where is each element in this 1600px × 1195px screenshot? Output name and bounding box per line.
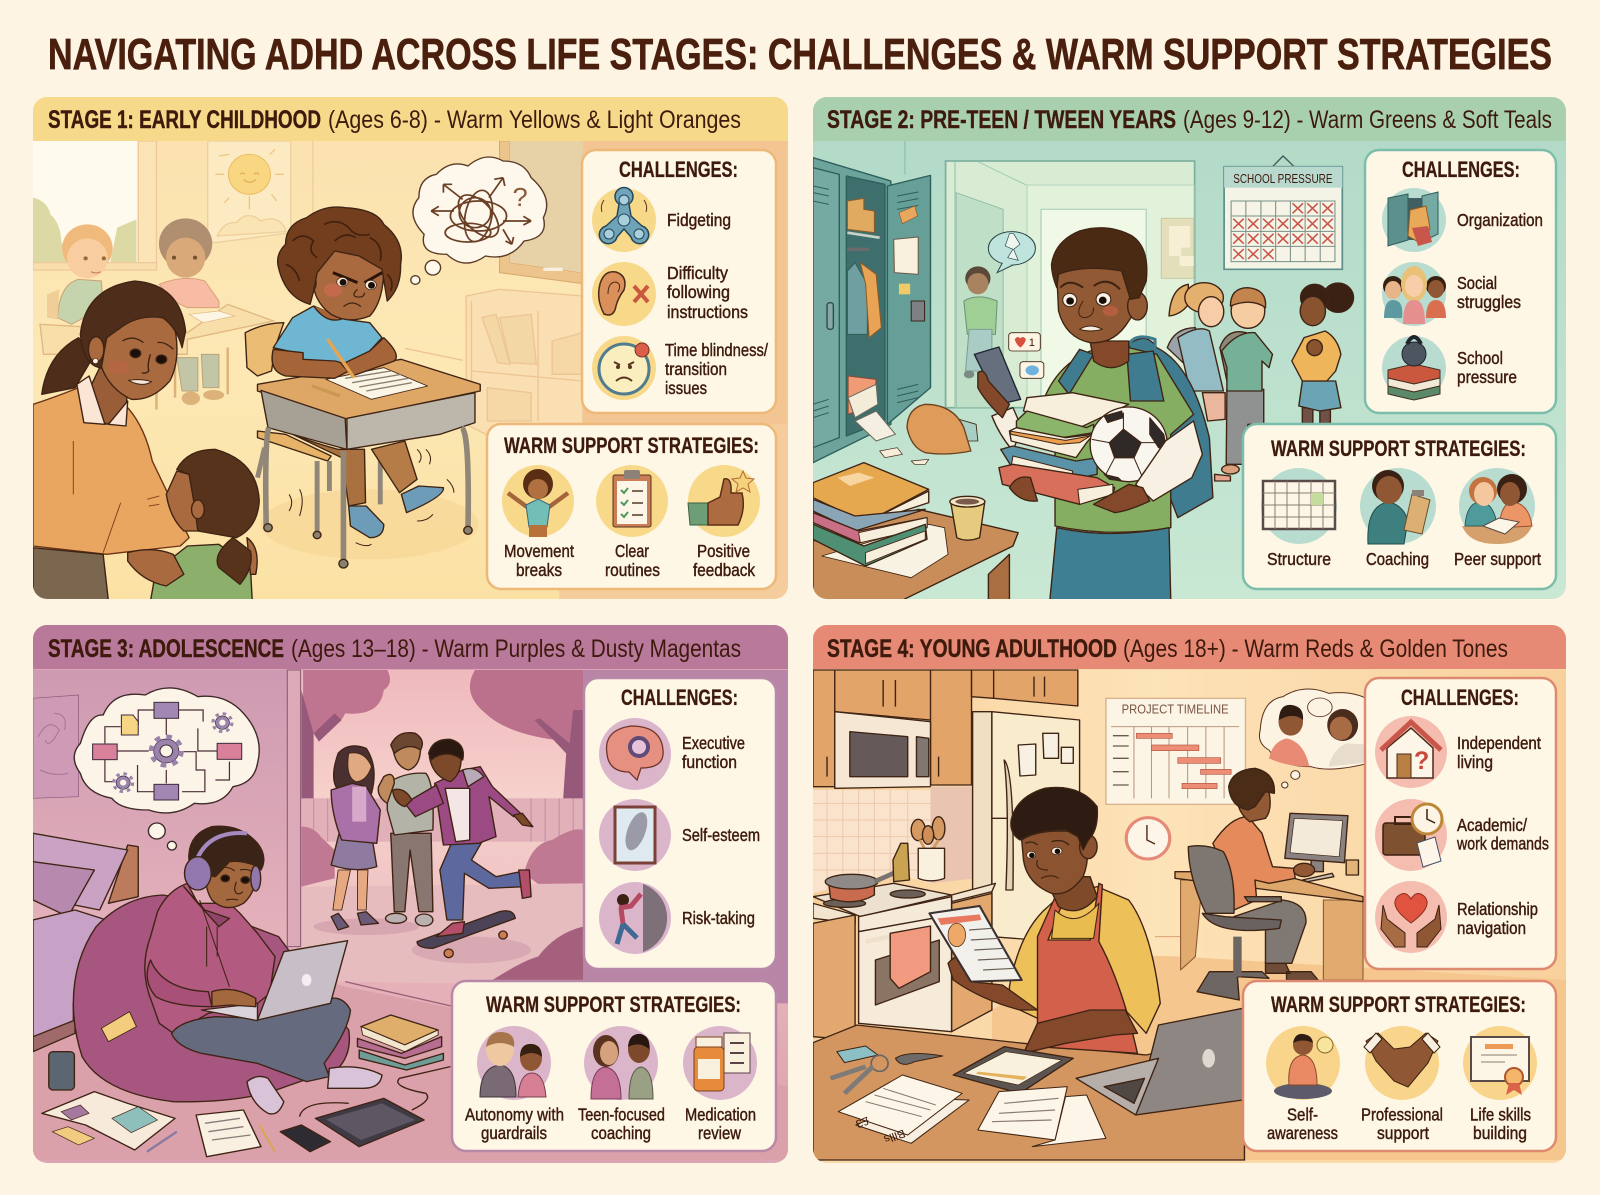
icon: social struggles xyxy=(1382,262,1446,326)
label: clear routines: routines xyxy=(605,560,660,580)
overwhelmed boy with books, ball and phone xyxy=(974,228,1213,601)
floor items: books, notebook, devices xyxy=(42,1015,450,1157)
label: self-awareness xyxy=(1267,1104,1338,1143)
label: structure: Structure xyxy=(1267,549,1331,569)
box: strategies xyxy=(452,981,776,1151)
window xyxy=(33,141,156,270)
label: executive function: Executive xyxy=(682,733,745,753)
box: challenges xyxy=(582,150,776,413)
wall poster xyxy=(33,695,79,798)
items on counter: tablet, laptop, papers, keys: £3 xyxy=(854,1114,871,1130)
label: school pressure xyxy=(1457,348,1517,387)
box: challenges xyxy=(1365,678,1556,969)
label: time blindness xyxy=(665,340,768,398)
box: strategies xyxy=(1243,424,1556,589)
label: organization: Organization xyxy=(1457,210,1543,230)
box: strategies xyxy=(1243,981,1556,1151)
icon: weekly schedule xyxy=(1261,468,1337,544)
sun poster xyxy=(208,138,291,243)
stage 2 header xyxy=(813,97,1566,141)
label: positive feedback: Positive xyxy=(697,541,750,561)
illustration: kitchen and home office xyxy=(813,670,1567,1160)
illustration: classroom xyxy=(33,138,805,601)
label: time blindness: issues xyxy=(665,378,707,398)
overwhelmed boy with books, ball and phone: 1 xyxy=(1029,337,1035,349)
background children xyxy=(40,218,273,409)
label: school pressure: School xyxy=(1457,348,1503,368)
woman reading tablet xyxy=(929,787,1160,1053)
label: autonomy with guardrails: guardrails xyxy=(481,1123,547,1143)
icon: cracked mirror xyxy=(599,799,671,871)
panel: stage 3 adolescence xyxy=(33,625,788,1163)
stage 1 header: (Ages 6-8) - Warm Yellows & Light Oranges xyxy=(328,106,741,134)
icon: house with question mark xyxy=(1375,716,1447,788)
icon: clipboard checklist xyxy=(596,465,668,537)
project timeline chart xyxy=(1106,698,1245,804)
label: positive feedback xyxy=(693,541,755,580)
label: relationship navigation: Relationship xyxy=(1457,899,1538,919)
icon: coach with clipboard xyxy=(1360,468,1436,544)
illustration: bedroom and friends outside xyxy=(33,670,788,1160)
label: autonomy with guardrails: Autonomy with xyxy=(465,1104,564,1124)
box: challenges xyxy=(1365,150,1556,413)
icon: briefcase and clock xyxy=(1375,799,1447,871)
icon: handshake xyxy=(1364,1026,1440,1100)
group of classmates xyxy=(1167,283,1354,481)
teacher xyxy=(33,281,259,601)
label: difficulty following instructions xyxy=(667,263,748,322)
icon: hands and heart xyxy=(1375,881,1447,953)
label: clear routines: Clear xyxy=(615,541,649,561)
bookshelf xyxy=(466,289,583,436)
stage 2 header: STAGE 2: PRE-TEEN / TWEEN YEARS xyxy=(827,106,1176,134)
label: coaching: Coaching xyxy=(1366,549,1429,569)
label: self-awareness: Self- xyxy=(1287,1104,1318,1124)
label: teen-focused coaching: Teen-focused xyxy=(578,1104,665,1124)
calendar: school pressure xyxy=(1224,156,1342,269)
icon: peers studying xyxy=(1459,468,1535,544)
heading: challenges: CHALLENGES: xyxy=(621,685,738,710)
counter xyxy=(813,1025,1244,1160)
label: relationship navigation xyxy=(1457,899,1538,938)
heading: challenges: CHALLENGES: xyxy=(1401,685,1519,710)
stage 4 header: STAGE 4: YOUNG ADULTHOOD xyxy=(827,635,1117,663)
label: independent living: Independent xyxy=(1457,733,1541,753)
label: life skills building xyxy=(1470,1104,1531,1143)
label: positive feedback: feedback xyxy=(693,560,755,580)
icon: parent and teen xyxy=(477,1026,551,1100)
icon: teen coaching xyxy=(584,1026,658,1100)
fidgeting boy at desk xyxy=(245,207,480,568)
label: social struggles: struggles xyxy=(1457,292,1521,312)
label: autonomy with guardrails xyxy=(465,1104,564,1143)
icon: brain with gear xyxy=(599,718,671,790)
icon: fidget spinner xyxy=(592,188,656,252)
label: self-awareness: awareness xyxy=(1267,1123,1338,1143)
items on counter: tablet, laptop, papers, keys: Bills xyxy=(882,1127,907,1146)
project timeline chart: PROJECT TIMELINE xyxy=(1122,702,1229,716)
fridge xyxy=(973,712,1080,943)
thought bubble: tangled thoughts xyxy=(411,157,547,284)
stage 4 header: (Ages 18+) - Warm Reds & Golden Tones xyxy=(1123,635,1508,663)
items on counter: tablet, laptop, papers, keys xyxy=(831,1008,1243,1147)
heading: challenges: CHALLENGES: xyxy=(619,157,738,182)
label: peer support: Peer support xyxy=(1454,549,1541,569)
stage 4 header xyxy=(813,625,1566,669)
label: professional support: support xyxy=(1377,1123,1429,1143)
floor xyxy=(33,970,788,1160)
panel: stage 1 early childhood xyxy=(33,97,805,601)
icon: movement break child xyxy=(502,465,574,537)
label: school pressure: pressure xyxy=(1457,367,1517,387)
label: professional support: Professional xyxy=(1361,1104,1443,1124)
panel: stage 4 young adulthood xyxy=(813,625,1567,1163)
stage 3 header: STAGE 3: ADOLESCENCE xyxy=(48,635,284,663)
doorway xyxy=(946,161,1195,408)
label: medication review xyxy=(685,1104,756,1143)
box: challenges xyxy=(584,678,776,969)
label: life skills building: Life skills xyxy=(1470,1104,1531,1124)
stage 1 header xyxy=(33,97,788,141)
label: movement breaks xyxy=(504,541,574,580)
illustration: school hallway xyxy=(813,141,1567,601)
thought bubble: flowchart xyxy=(74,688,259,850)
wall clock xyxy=(1126,818,1170,859)
icon: sad clock xyxy=(592,336,656,400)
stove, oven and pot xyxy=(813,817,995,1040)
heading: strategies: WARM SUPPORT STRATEGIES: xyxy=(504,433,759,458)
thought bubble: two people talking xyxy=(1259,689,1374,788)
heading: strategies: WARM SUPPORT STRATEGIES: xyxy=(486,992,741,1017)
chalkboard xyxy=(500,141,583,284)
label: executive function: function xyxy=(682,752,737,772)
label: difficulty following instructions: instructions xyxy=(667,302,748,322)
box: strategies xyxy=(487,424,776,589)
label: academic work demands: Academic/ xyxy=(1457,815,1527,835)
man working at desk xyxy=(1175,768,1363,1000)
orange backpack on floor xyxy=(880,404,978,464)
label: social struggles: Social xyxy=(1457,273,1497,293)
label: social struggles xyxy=(1457,273,1521,312)
label: medication review: review xyxy=(698,1123,741,1143)
icon: certificate xyxy=(1463,1026,1537,1100)
icon: medication and checklist xyxy=(683,1026,757,1100)
tile backsplash xyxy=(813,786,972,894)
thought bubble: tangled thoughts: ? xyxy=(513,183,528,212)
label: teen-focused coaching xyxy=(578,1104,665,1143)
label: fidgeting: Fidgeting xyxy=(667,210,731,230)
label: risk-taking: Risk-taking xyxy=(682,908,755,928)
desk with books and cup xyxy=(813,463,1018,601)
icon: kettlebell on books xyxy=(1382,336,1446,400)
friends outdoors xyxy=(331,733,533,958)
label: academic work demands: work demands xyxy=(1456,834,1549,854)
lockers xyxy=(813,158,931,463)
label: independent living xyxy=(1457,733,1541,772)
label: movement breaks: Movement xyxy=(504,541,574,561)
label: life skills building: building xyxy=(1473,1123,1527,1143)
icon: house with question mark: ? xyxy=(1414,747,1429,775)
icon: messy locker xyxy=(1382,188,1446,252)
label: academic work demands xyxy=(1456,815,1549,854)
icon: meditation and light bulb xyxy=(1266,1026,1340,1100)
stage 3 header xyxy=(33,625,788,669)
icon: ear with cross xyxy=(592,262,656,326)
label: executive function xyxy=(682,733,745,772)
label: professional support xyxy=(1361,1104,1443,1143)
heading: strategies: WARM SUPPORT STRATEGIES: xyxy=(1271,436,1526,461)
label: self-esteem: Self-esteem xyxy=(682,825,760,845)
icon: thumbs up with star xyxy=(688,465,760,537)
label: independent living: living xyxy=(1457,752,1493,772)
label: teen-focused coaching: coaching xyxy=(591,1123,651,1143)
label: time blindness: transition xyxy=(665,359,727,379)
calendar: school pressure: SCHOOL PRESSURE xyxy=(1233,171,1332,186)
label: medication review: Medication xyxy=(685,1104,756,1124)
stage 3 header: (Ages 13–18) - Warm Purples & Dusty Magentas xyxy=(291,635,741,663)
outdoor view xyxy=(301,670,583,1007)
teen on beanbag with laptop xyxy=(73,826,382,1114)
label: movement breaks: breaks xyxy=(516,560,562,580)
label: difficulty following instructions: following xyxy=(667,282,730,302)
heading: strategies: WARM SUPPORT STRATEGIES: xyxy=(1271,992,1526,1017)
panel: stage 2 pre-teen xyxy=(813,97,1567,601)
background boy and speech bubble xyxy=(964,232,1035,378)
heading: challenges: CHALLENGES: xyxy=(1402,157,1520,182)
kitchen cabinets and microwave xyxy=(813,670,1078,788)
label: relationship navigation: navigation xyxy=(1457,918,1526,938)
label: clear routines xyxy=(605,541,660,580)
icon: risk-taking climber xyxy=(599,882,671,954)
label: difficulty following instructions: Difficulty xyxy=(667,263,728,283)
stage 1 header: STAGE 1: EARLY CHILDHOOD xyxy=(48,106,321,134)
label: time blindness: Time blindness/ xyxy=(665,340,768,360)
bed xyxy=(33,833,138,1052)
